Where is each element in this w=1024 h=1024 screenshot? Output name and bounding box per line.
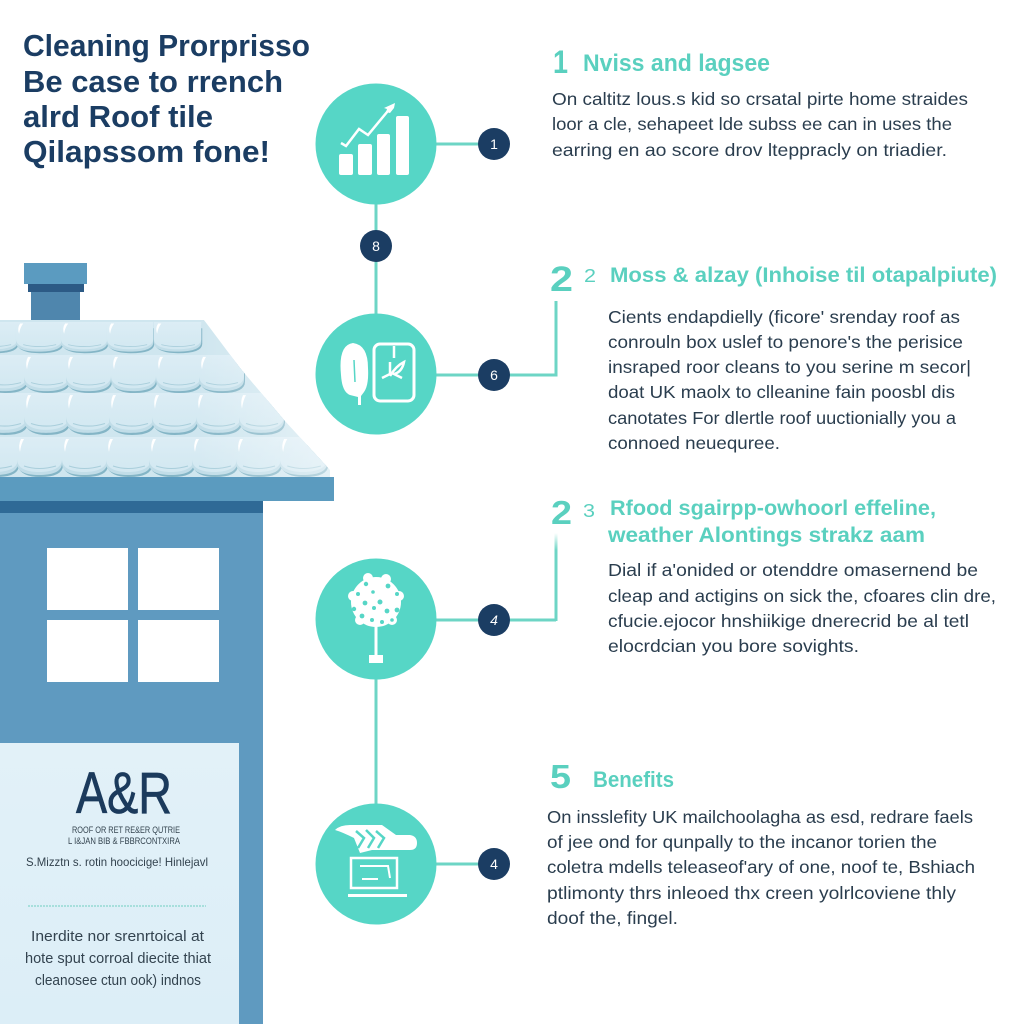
section 1 text: earring en ao score drov lteppracly on triadier.	[552, 140, 947, 160]
sign text: cleanosee ctun ook) indnos	[35, 972, 201, 989]
section 3 heading: 2	[551, 494, 572, 531]
roof tiles	[0, 320, 330, 478]
section 5 text: ptlimonty thrs inleoed thx creen yolrlcoviene thly	[547, 883, 956, 903]
title: Be case to rrench	[23, 65, 283, 99]
node 6	[478, 359, 510, 391]
wall	[0, 512, 263, 1024]
section 5 text: On insslefity UK mailchoolagha as esd, redrare faels	[547, 807, 973, 827]
eave shadow	[0, 501, 263, 513]
section 2 text: Cients endapdielly (ficore' srenday roof as	[608, 307, 960, 327]
section 3 text: cfucie.ejocor hnshiikige dnerecrid be al tetl	[608, 611, 969, 631]
section 2 heading: 2	[550, 260, 573, 299]
section 2 text	[608, 307, 971, 453]
house illustration	[0, 263, 334, 1024]
section 3 heading: 3	[583, 501, 595, 521]
window	[47, 548, 219, 682]
section 5 text: of jee ond for qunpally to the incanor torien the	[547, 832, 937, 852]
section 5 text	[547, 807, 975, 928]
chimney	[24, 263, 87, 326]
icon: growth chart	[316, 84, 436, 204]
node 4 lower: 4	[490, 856, 498, 872]
section 3	[551, 494, 996, 656]
section 1 heading	[553, 44, 770, 80]
title: alrd Roof tile	[23, 100, 213, 134]
node 4 upper	[478, 604, 510, 636]
logo: A&R	[76, 761, 172, 826]
sign subtitle: S.Mizztn s. rotin hoocicige! Hinlejavl	[26, 855, 208, 869]
logo tagline: L I&JAN BIB & FBBRCONTXIRA	[68, 836, 180, 846]
section 2 text: doat UK maolx to clleanine fain poosbl dis	[608, 382, 955, 402]
sign text: hote sput corroal diecite thiat	[25, 950, 212, 967]
section 2 text: connoed neuequree.	[608, 433, 780, 453]
section 5 text: doof the, fingel.	[547, 908, 678, 928]
icon: toolbox	[316, 804, 436, 924]
title	[23, 29, 310, 169]
section 5 heading: Benefits	[593, 767, 674, 792]
section 1 text	[552, 89, 968, 160]
section 3 text: cleap and actigins on sick the, cfoares clin dre,	[608, 586, 996, 606]
section 5 text: coletra mdells teleaseof'ary of one, noof te, Bshiach	[547, 857, 975, 877]
section 2 heading: Moss & alzay (Inhoise til otapalpiute)	[610, 264, 997, 287]
sign text: Inerdite nor srenrtoical at	[31, 928, 205, 945]
panel: company sign	[0, 743, 239, 1024]
title: Cleaning Prorprisso	[23, 29, 310, 63]
section 3 heading: weather Alontings strakz aam	[607, 524, 925, 547]
section 2	[550, 260, 997, 453]
section 1	[552, 44, 968, 160]
logo tagline	[68, 825, 180, 846]
section 3 heading: Rfood sgairpp-owhoorl effeline,	[610, 497, 936, 520]
section 2 text: conrouln box uslef to penore's the perisice	[608, 332, 963, 352]
section 2 text: insraped roor cleans to you serine m secor|	[608, 357, 971, 377]
section 2 text: canotates For dlertle roof uuctionially you a	[608, 408, 956, 428]
node 6: 6	[490, 367, 498, 383]
sign text	[25, 928, 212, 989]
section 5	[547, 758, 975, 928]
section 5 heading: 5	[550, 758, 571, 795]
title: Qilapssom fone!	[23, 135, 270, 169]
connector lines	[376, 144, 556, 864]
logo tagline: ROOF OR RET RE&ER QUTRIE	[72, 825, 180, 835]
icon: tree	[316, 558, 436, 680]
section 3 text	[608, 560, 996, 656]
node 1: 1	[490, 136, 498, 152]
section 3 heading	[551, 494, 936, 547]
section 1 heading: 1	[553, 44, 568, 80]
section 1 text: On caltitz lous.s kid so crsatal pirte home straides	[552, 89, 968, 109]
section 2 heading: 2	[584, 266, 596, 286]
eave	[0, 477, 334, 501]
node 1	[478, 128, 510, 160]
section 3 text: elocrdcian you bore sovights.	[608, 636, 859, 656]
section 2 heading	[550, 260, 997, 299]
node 4 lower	[478, 848, 510, 880]
node 3	[360, 230, 392, 262]
section 5 heading	[550, 758, 674, 795]
section 1 text: loor a cle, sehapeet lde subss ee can in uses the	[552, 114, 952, 134]
section 1 heading: Nviss and lagsee	[583, 50, 770, 77]
node 3: 8	[372, 238, 380, 254]
section 3 text: Dial if a'onided or otenddre omasernend be	[608, 560, 978, 580]
icon: moss brush and panel	[316, 314, 436, 434]
node 4 upper: 4	[490, 612, 498, 628]
